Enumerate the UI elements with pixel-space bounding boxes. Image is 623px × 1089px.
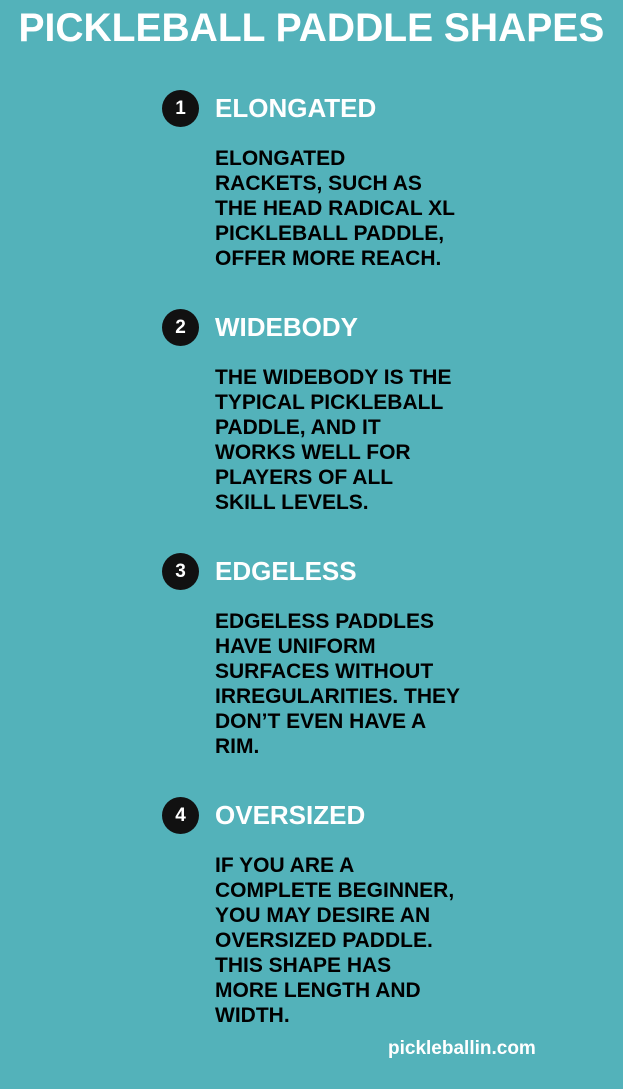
text: elongated description: ELONGATED (215, 147, 345, 170)
text: elongated description: OFFER MORE REACH. (215, 247, 441, 270)
item 3: edgeless (162, 553, 460, 758)
text: edgeless description: HAVE UNIFORM (215, 635, 376, 658)
title: PICKLEBALL PADDLE SHAPES (19, 6, 604, 50)
icon: number 4 (162, 797, 199, 834)
footer: website: pickleballin.com (388, 1038, 536, 1059)
text: elongated description (215, 147, 455, 270)
text: oversized description: THIS SHAPE HAS (215, 954, 391, 977)
text: elongated description: PICKLEBALL PADDLE, (215, 222, 444, 245)
text: oversized description: MORE LENGTH AND (215, 979, 421, 1002)
text: oversized description: IF YOU ARE A (215, 854, 354, 877)
text: oversized description: WIDTH. (215, 1004, 290, 1027)
text: elongated description: THE HEAD RADICAL XL (215, 197, 455, 220)
text: edgeless description: EDGELESS PADDLES (215, 610, 434, 633)
text: widebody description: PADDLE, AND IT (215, 416, 381, 439)
text: elongated description: RACKETS, SUCH AS (215, 172, 422, 195)
text: widebody description: SKILL LEVELS. (215, 491, 369, 514)
text: oversized description: COMPLETE BEGINNER, (215, 879, 454, 902)
heading: oversized: OVERSIZED (215, 800, 365, 830)
icon: number 3 (162, 553, 199, 590)
item 1: elongated (162, 90, 455, 270)
text: edgeless description: RIM. (215, 735, 259, 758)
heading: elongated: ELONGATED (215, 93, 376, 123)
text: widebody description: TYPICAL PICKLEBALL (215, 391, 443, 414)
heading: edgeless: EDGELESS (215, 556, 357, 586)
text: oversized description: OVERSIZED PADDLE. (215, 929, 433, 952)
text: widebody description: THE WIDEBODY IS THE (215, 366, 451, 389)
icon: number 1: 1 (175, 98, 186, 119)
text: edgeless description (215, 610, 460, 758)
icon: number 2 (162, 309, 199, 346)
icon: number 1 (162, 90, 199, 127)
icon: number 3: 3 (175, 561, 186, 582)
icon: number 2: 2 (175, 317, 186, 338)
item 2: widebody (162, 309, 451, 514)
heading: widebody: WIDEBODY (215, 312, 358, 342)
text: edgeless description: IRREGULARITIES. THEY (215, 685, 460, 708)
text: widebody description: PLAYERS OF ALL (215, 466, 393, 489)
text: edgeless description: DON’T EVEN HAVE A (215, 710, 426, 733)
item 4: oversized (162, 797, 454, 1027)
text: widebody description: WORKS WELL FOR (215, 441, 411, 464)
text: oversized description (215, 854, 454, 1027)
text: oversized description: YOU MAY DESIRE AN (215, 904, 430, 927)
icon: number 4: 4 (175, 805, 186, 826)
text: edgeless description: SURFACES WITHOUT (215, 660, 433, 683)
text: widebody description (215, 366, 451, 514)
